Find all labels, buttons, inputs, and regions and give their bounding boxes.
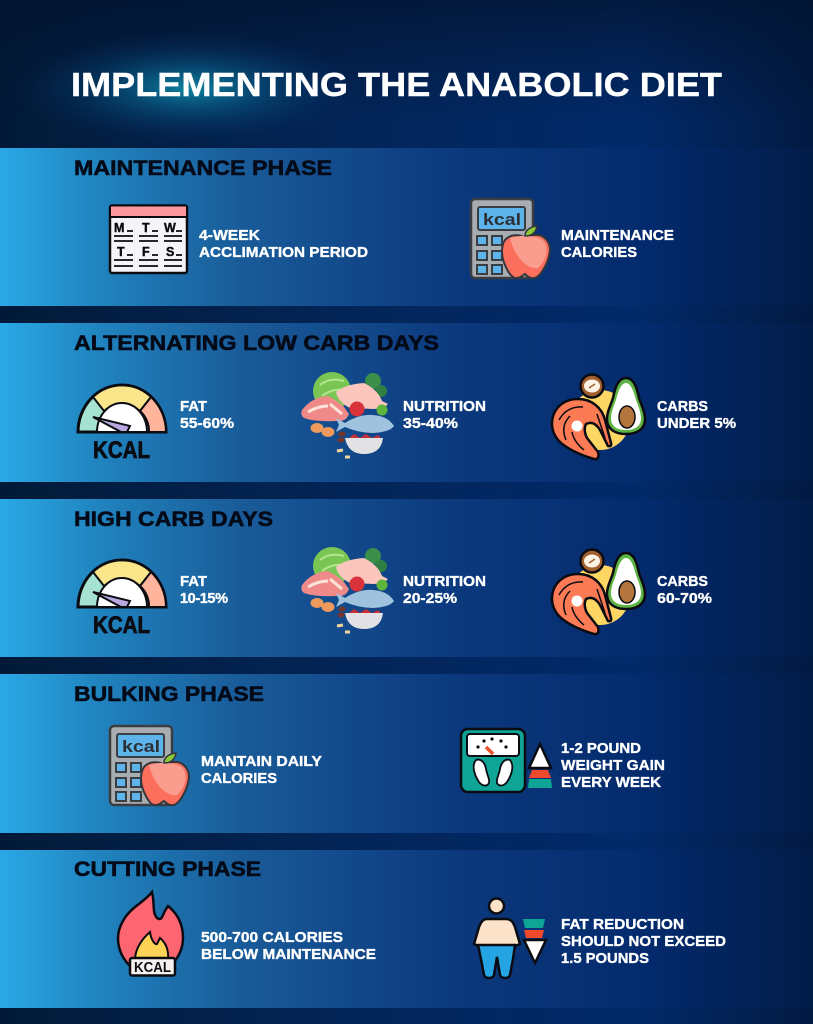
- text: fat 10-15%: [180, 574, 228, 607]
- title: IMPLEMENTING THE ANABOLIC DIET: [71, 67, 723, 104]
- icon: calendar: S: [166, 245, 174, 259]
- text: fat 10-15%: 10-15%: [180, 591, 228, 607]
- icon: kcal gauge: KCAL: [93, 612, 150, 639]
- text: nutrition 20-25%: 20-25%: [403, 591, 457, 607]
- icon: kcal gauge: [78, 560, 166, 639]
- icon: salmon and avocado: [552, 550, 645, 634]
- text: calories below maintenance: [201, 930, 376, 963]
- text: mantain daily calories: CALORIES: [201, 771, 277, 787]
- panel: bulking phase: [0, 674, 813, 833]
- heading: bulking phase: BULKING PHASE: [74, 683, 264, 706]
- icon: food group: [301, 372, 394, 457]
- icon: salmon and avocado: [552, 374, 645, 459]
- text: fat reduction: SHOULD NOT EXCEED: [561, 934, 726, 950]
- text: acclimation period: 4-WEEK: [199, 228, 261, 244]
- text: weight gain: 1-2 POUND: [561, 741, 641, 757]
- heading: cutting phase: CUTTING PHASE: [74, 858, 261, 881]
- text: mantain daily calories: [201, 754, 322, 787]
- text: nutrition 35-40%: 35-40%: [403, 416, 458, 432]
- icon: calendar: F: [142, 245, 150, 259]
- text: fat 10-15%: FAT: [180, 574, 207, 590]
- icon: kcal flame: KCAL: [134, 960, 171, 976]
- icon: food group: [301, 547, 394, 632]
- text: carbs 60-70%: CARBS: [657, 574, 708, 590]
- text: maintenance calories: MAINTENANCE: [561, 228, 674, 244]
- icon: up arrow pyramid: [528, 744, 552, 788]
- text: carbs under 5%: UNDER 5%: [657, 416, 736, 432]
- icon: kcal flame: [118, 892, 183, 976]
- icon: weight scale: [461, 729, 525, 792]
- text: carbs under 5%: CARBS: [657, 399, 708, 415]
- icon: kcal gauge: [78, 385, 166, 464]
- panel: alternating low carb days: [0, 323, 813, 482]
- text: fat reduction: 1.5 POUNDS: [561, 951, 649, 967]
- text: fat 55-60%: 55-60%: [180, 416, 234, 432]
- text: fat 55-60%: [180, 399, 234, 432]
- icon: calculator with apple: [471, 199, 550, 278]
- text: weight gain: WEIGHT GAIN: [561, 758, 665, 774]
- text: carbs under 5%: [657, 399, 736, 432]
- icon: calendar: M: [114, 221, 124, 235]
- panel: maintenance phase: [0, 148, 813, 306]
- text: acclimation period: [199, 228, 368, 261]
- text: fat reduction: [561, 917, 726, 967]
- text: weight gain: EVERY WEEK: [561, 775, 662, 791]
- heading: alternating low carb days: ALTERNATING LOW CARB DAYS: [74, 332, 439, 355]
- icon: calculator with apple: [110, 726, 189, 805]
- text: nutrition 20-25%: [403, 574, 486, 607]
- text: maintenance calories: [561, 228, 674, 261]
- icon: calculator with apple: kcal: [122, 737, 160, 756]
- icon: calendar: T: [117, 245, 125, 259]
- text: nutrition 20-25%: NUTRITION: [403, 574, 486, 590]
- heading: maintenance phase: MAINTENANCE PHASE: [74, 157, 332, 180]
- text: nutrition 35-40%: [403, 399, 486, 432]
- icon: calendar: T: [142, 221, 150, 235]
- panel: cutting phase: [0, 850, 813, 1008]
- icon: kcal gauge: KCAL: [93, 437, 150, 464]
- text: nutrition 35-40%: NUTRITION: [403, 399, 486, 415]
- text: mantain daily calories: MANTAIN DAILY: [201, 754, 322, 770]
- panel: high carb days: [0, 499, 813, 657]
- icon: calendar: W: [164, 221, 176, 235]
- text: fat reduction: FAT REDUCTION: [561, 917, 684, 933]
- icon: calculator with apple: kcal: [483, 210, 521, 229]
- text: carbs 60-70%: [657, 574, 712, 607]
- text: acclimation period: ACCLIMATION PERIOD: [199, 245, 368, 261]
- icon: calendar: [110, 206, 187, 273]
- text: carbs 60-70%: 60-70%: [657, 591, 712, 607]
- icon: person losing weight: [474, 898, 520, 978]
- text: calories below maintenance: 500-700 CALORIES: [201, 930, 343, 946]
- heading: high carb days: HIGH CARB DAYS: [74, 508, 273, 531]
- text: maintenance calories: CALORIES: [561, 245, 637, 261]
- icon: down arrow pyramid: [523, 919, 546, 963]
- text: weight gain: [561, 741, 665, 791]
- text: fat 55-60%: FAT: [180, 399, 207, 415]
- text: calories below maintenance: BELOW MAINTENANCE: [201, 947, 376, 963]
- title glow: [10, 30, 370, 146]
